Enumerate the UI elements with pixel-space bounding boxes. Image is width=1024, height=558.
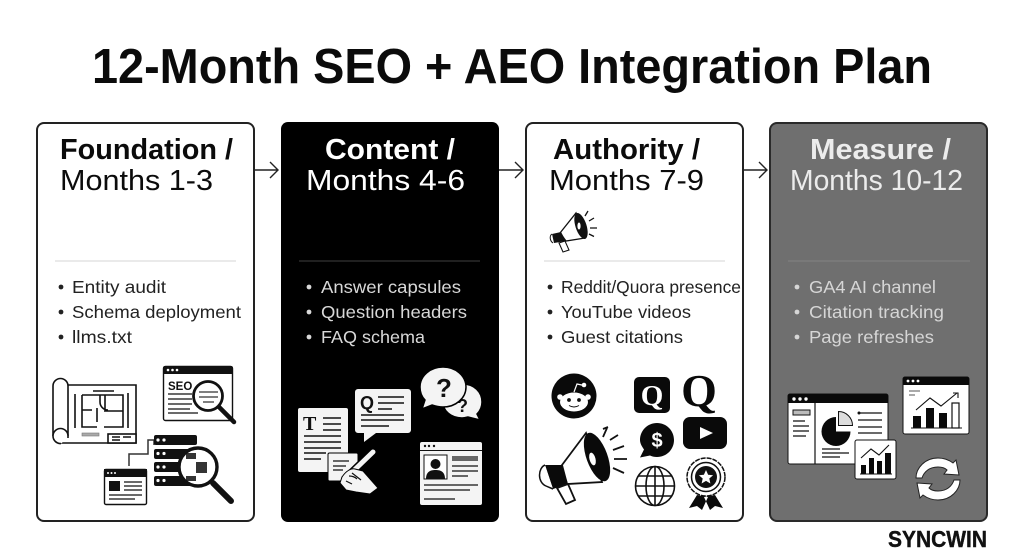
bullet list: authority: YouTube videos <box>561 302 691 322</box>
bullet list: content: Answer capsules <box>321 277 461 297</box>
panel: content <box>281 122 499 522</box>
icon: analytics dashboard <box>788 394 888 464</box>
heading: foundation <box>60 134 233 197</box>
icon: award badge <box>687 458 725 510</box>
panel: measure <box>770 123 987 521</box>
bullet list: foundation: Entity audit <box>72 277 166 297</box>
heading: foundation: Foundation / <box>60 134 233 166</box>
heading: authority: Months 7-9 <box>549 165 704 197</box>
icon: page window <box>104 469 147 504</box>
bullet list: authority: Reddit/Quora presence <box>561 277 741 297</box>
bullet list: foundation: llms.txt <box>72 327 132 347</box>
heading: measure: Measure / <box>810 134 951 166</box>
title: 12-Month SEO + AEO Integration Plan <box>92 40 932 94</box>
bullet list: content: Question headers <box>321 302 467 322</box>
heading: content <box>306 134 465 197</box>
heading: foundation: Months 1-3 <box>60 165 213 197</box>
icon: dollar bubble: $ <box>651 430 663 452</box>
heading: authority <box>549 134 704 197</box>
icon: reddit <box>552 374 596 418</box>
icon: Quora square <box>634 377 670 413</box>
icon: Q speech bubble <box>355 389 411 442</box>
icon: SEO window with magnifier <box>163 366 234 422</box>
heading: content: Content / <box>325 134 455 166</box>
icon: Quora square: Q <box>641 380 663 412</box>
icon: profile window <box>420 442 482 505</box>
arrow: content to authority <box>498 162 523 178</box>
icon: text document <box>298 408 348 472</box>
icon: small chart card <box>855 440 896 479</box>
bullet list: measure: GA4 AI channel <box>809 277 936 297</box>
bullet list: content <box>307 277 467 347</box>
bullet list: measure <box>795 277 944 347</box>
icon: blueprint <box>53 379 136 444</box>
icon: small megaphone <box>550 211 597 252</box>
icon: database with magnifier <box>129 435 231 501</box>
icon: note and hand with pencil <box>328 452 378 494</box>
icon: question bubbles <box>420 367 482 420</box>
icon: question bubbles: ? <box>457 396 468 416</box>
icon: large megaphone <box>540 427 627 504</box>
bullet list: foundation: Schema deployment <box>72 302 241 322</box>
panel: authority <box>526 123 743 521</box>
heading: authority: Authority / <box>553 134 700 166</box>
icon: YouTube <box>683 417 727 449</box>
icon: dollar bubble <box>640 423 674 458</box>
heading: content: Months 4-6 <box>306 165 465 197</box>
arrow: foundation to content <box>254 162 278 178</box>
arrow: authority to measure <box>743 162 767 178</box>
bullet list: authority: Guest citations <box>561 327 683 347</box>
bullet list: measure: Citation tracking <box>809 302 944 322</box>
icon: question bubbles: ? <box>436 373 452 403</box>
panel: foundation <box>37 123 254 521</box>
heading: measure: Months 10-12 <box>790 165 963 197</box>
icon: Quora letter: Q <box>681 365 717 416</box>
icon: refresh arrows <box>916 458 960 500</box>
icon: SEO window with magnifier: SEO <box>168 381 192 393</box>
bullet list: foundation <box>59 277 241 347</box>
logo: syncwin: SYNCWIN <box>888 526 987 552</box>
bullet list: authority <box>548 277 741 347</box>
icon: Q speech bubble: Q <box>360 393 374 413</box>
heading: measure <box>790 134 963 197</box>
icon: text document: T <box>303 413 317 435</box>
bullet list: content: FAQ schema <box>321 327 425 347</box>
bullet list: measure: Page refreshes <box>809 327 934 347</box>
icon: chart window <box>903 377 969 434</box>
icon: globe <box>636 466 674 506</box>
